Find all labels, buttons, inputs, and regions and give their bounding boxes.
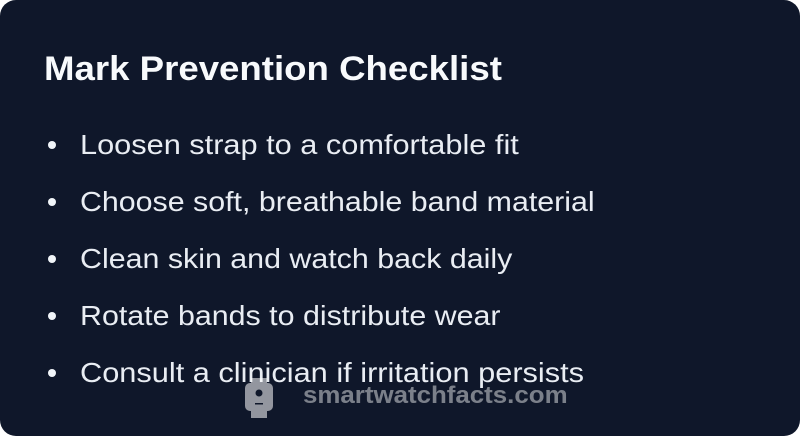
title: Mark Prevention Checklist xyxy=(44,50,502,88)
icon: smartwatch xyxy=(245,378,273,418)
watermark xyxy=(245,378,568,418)
item 4: Rotate bands to distribute wear xyxy=(80,300,501,331)
watermark text: smartwatchfacts.com xyxy=(303,382,568,409)
item 5: Consult a clinician if irritation persists xyxy=(80,357,584,388)
checklist xyxy=(48,129,595,388)
item 2: Choose soft, breathable band material xyxy=(80,186,595,217)
item 1: Loosen strap to a comfortable fit xyxy=(80,129,519,160)
item 3: Clean skin and watch back daily xyxy=(80,243,512,274)
